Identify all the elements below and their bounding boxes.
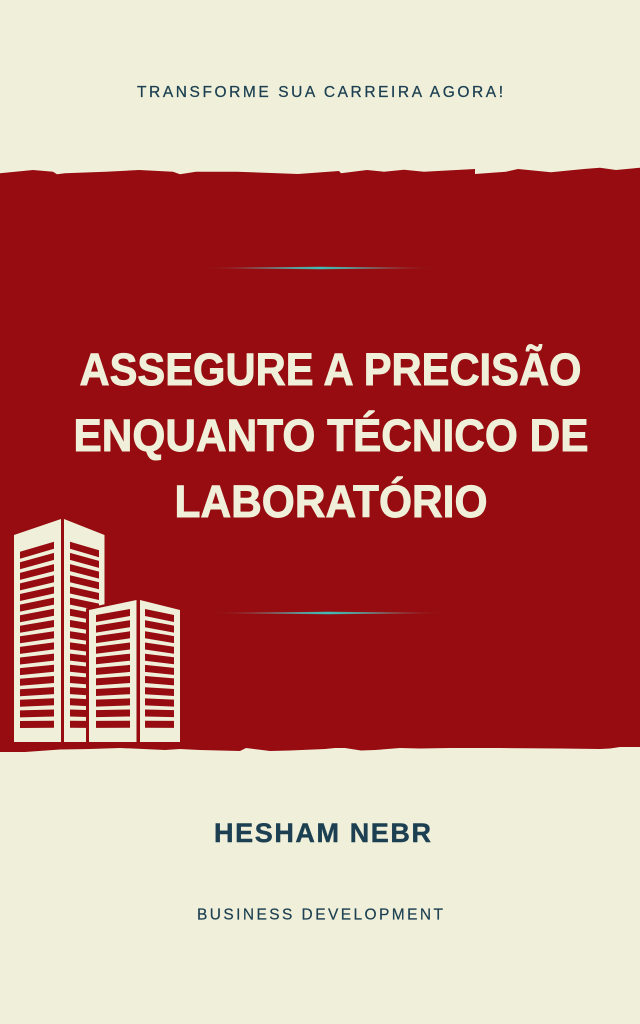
top divider line	[200, 267, 440, 269]
icon: office buildings	[14, 519, 183, 745]
gap around small building	[86, 597, 183, 745]
tagline: TRANSFORME SUA CARREIRA AGORA!	[137, 84, 503, 101]
title	[74, 344, 588, 527]
small building front windows	[96, 609, 130, 728]
subject label: BUSINESS DEVELOPMENT	[197, 906, 444, 924]
tall tower front windows	[20, 542, 54, 728]
tall tower side face	[64, 519, 104, 742]
title line 1: ASSEGURE A PRECISÃO	[80, 344, 582, 395]
title line 2: ENQUANTO TÉCNICO DE	[74, 410, 588, 461]
red torn-edge band	[0, 168, 640, 752]
small building side face	[140, 600, 180, 742]
small building front face	[89, 600, 136, 742]
tall tower side windows	[70, 542, 99, 728]
title line 3: LABORATÓRIO	[174, 476, 488, 527]
small building side windows	[145, 609, 174, 728]
author name: HESHAM NEBR	[214, 818, 431, 848]
bottom divider line	[208, 612, 448, 614]
tall tower front face	[14, 519, 61, 742]
